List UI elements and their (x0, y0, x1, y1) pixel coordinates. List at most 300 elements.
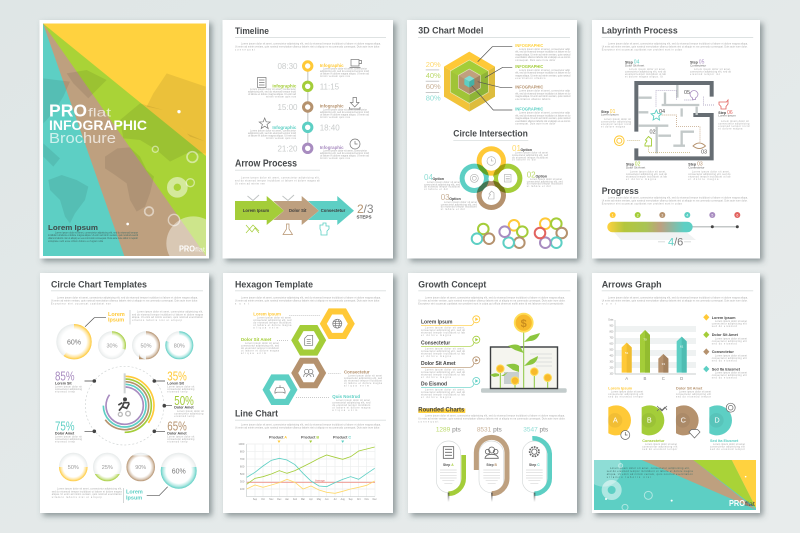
panel: labyrinth process and progress (592, 20, 760, 258)
stat 65 percent: Dolor Amet (167, 432, 187, 436)
option 03: 03 (441, 193, 450, 202)
step 01: Step 01 (601, 109, 616, 115)
stat 85 percent: eiusmod temp (55, 390, 76, 394)
step 06 (718, 110, 750, 130)
chart: arrow bar chart: 33 (662, 362, 665, 366)
step 01 (601, 109, 632, 128)
caption: consectetur: sed do eiusmod tempor (642, 448, 678, 451)
chart label 1: exercitation ullamco laboris nisi ut aliquip ex ea comm (515, 56, 570, 59)
step 01: consectetur adipisicing (601, 120, 632, 124)
stat 75 percent: Lorem ipsum dolor sit (55, 436, 82, 438)
growth item: lorem ipsum: eiusmod tempor incididunt ut lab (421, 332, 466, 335)
steps counter: /3 (364, 202, 374, 216)
step 02: et dolore magna (626, 178, 657, 181)
callout: top lorem ipsum: sed do eiusmod tempor incididunt ut labore et dolore magna (132, 313, 204, 316)
score labels: 1289 pts (436, 427, 462, 434)
timeline item 4: minim veniam quis nos (266, 137, 297, 140)
panel: circle chart templates (40, 273, 209, 513)
growth item: dolor sit amet: consectetur adipisicing elit, sed do (421, 371, 466, 374)
timeline item 5: adipisicing elit, sed do eiusmod tempor incid (320, 152, 370, 155)
chart: arrow bar chart: B (644, 376, 647, 381)
hexagon label: consectetur: Lorem ipsum dolor sit amet (348, 374, 382, 378)
heading: 3D chart model: 3D Chart Model (418, 25, 483, 35)
circle chart intro text: Ut enim ad minim veniam, quis nostrud exercitation ullamco laboris nisi ut aliquip ex ea commodo consequat. Duis aute irure dolor. (51, 299, 198, 302)
chart: arrow bar chart: 100 (609, 374, 614, 376)
chart: line chart: Jul (334, 499, 337, 501)
legend: dolor sit amet: Lorem ipsum dolor sit amet (715, 337, 747, 340)
growth item: dolor sit amet (421, 357, 480, 379)
step 03: consectetur adipisicing elit, sed do (688, 173, 731, 176)
chart label 2: INFOGRAPHIC (515, 64, 544, 69)
arrows graph intro text: sunt (602, 302, 616, 305)
step 03: Lorem ipsum dolor sit amet, (692, 170, 730, 174)
chart label 1 (515, 43, 571, 62)
callout: top lorem ipsum: ullamco laboris nisi ut aliquip (132, 319, 183, 322)
legend: sed ita eiusmet: Sed Ita Eiusmet (712, 368, 741, 372)
step 04: et dolore magna aliqua. Ut (625, 76, 663, 78)
cover title: INFOGRAPHIC (49, 118, 147, 133)
chart: arrow bar chart: 700 (609, 338, 614, 340)
timeline item 1: ut labore et dolore magna aliqua. Ut enim ad (320, 72, 370, 76)
step 02 (626, 161, 668, 181)
timeline times: 21:20 (277, 144, 298, 154)
heading: progress: Progress (602, 186, 639, 197)
score labels: 8531 pts (477, 427, 503, 434)
timeline item 3: minim veniam quis nos (320, 116, 351, 119)
rounded charts intro text: Lorem ipsum dolor sit amet, consectetur adipisicing elit, sed do eiusmod tempor incididunt ut labore et dolore magna aliqua. (425, 414, 565, 418)
chart: arrow bar chart: 600 (609, 344, 614, 346)
chart label 4 (515, 107, 571, 126)
legend: dolor sit amet: consectetur adipisicing elit (712, 340, 747, 343)
score labels: 3547 pts (523, 427, 549, 434)
growth item: consectetur: eiusmod tempor incididunt ut lab (421, 352, 466, 355)
legend: consectetur: Lorem ipsum dolor sit amet (715, 354, 747, 357)
percentage scale (426, 60, 441, 103)
option 02: Lorem ipsum dolor sit amet (530, 178, 562, 181)
caption: sed ita eiusmet: sed do eiusmod tempor (710, 448, 745, 451)
chart label 1: consequat. Duis aute irure dolor (515, 59, 556, 62)
line chart intro text: Ut enim ad minim veniam, quis nostrud exercitation ullamco laboris nisi ut aliquip ex ea commodo consequat. Duis aute irure dolor. (235, 427, 380, 430)
callout: bottom lorem ipsum: ullamco laboris nisi ut aliquip (52, 496, 102, 499)
arrow: lorem ipsum: Lorem Ipsum (243, 208, 269, 213)
legend: consectetur (703, 348, 747, 362)
step 03: Consectetur (688, 165, 704, 169)
line chart legend (269, 435, 351, 443)
icon: flask (283, 224, 292, 234)
circle chart intro text: Lorem ipsum dolor sit amet, consectetur adipisicing elit, sed do eiusmod tempor incididunt ut labore et dolore magna aliqua. (57, 296, 198, 299)
chart: nested 3D hexagon (444, 52, 495, 112)
hexagon label: consectetur: consectetur adipisicing elit, sed (344, 377, 383, 380)
donut: 60 percent yellow: 60% (67, 340, 81, 346)
illustration: laptop with money plant: $ (521, 318, 527, 330)
arrow: dolor sit (273, 196, 319, 225)
option 01: Option (520, 148, 532, 152)
chart label 4: magna aliqua. Ut enim ad minim veniam, quis nostrud (515, 117, 571, 120)
timeline times: 11:15 (320, 82, 340, 92)
hexagon label: consectetur: do eiusmod tempor incididunt (344, 380, 382, 382)
step 04: eiusmod tempor incididunt ut lab (625, 73, 667, 76)
timeline item 2: Lorem ipsum dolor sit amet, consectetur (250, 88, 296, 91)
chart: arrow bar chart: 900 (609, 326, 614, 328)
stat 75 percent: eiusmod temp (55, 440, 76, 444)
heading: circle intersection: Circle Intersection (453, 129, 528, 140)
legend: sed ita eiusmet: consectetur adipisicing elit (712, 374, 747, 377)
donut: 80 percent teal (165, 331, 193, 359)
option 02: 02 (527, 170, 536, 179)
option 01: do eiusmod tempor incididunt (512, 156, 548, 159)
timeline item 1 (320, 63, 370, 78)
step 02: Lorem ipsum dolor sit amet, (630, 170, 666, 174)
leader lines (472, 47, 512, 110)
chart: arrow bar chart: 300 (609, 362, 614, 364)
chart: arrow bar chart: 70 (643, 338, 647, 342)
maze icons (614, 90, 728, 148)
chart label 3: elit, sed do eiusmod tempor incididunt ut labore et do (515, 92, 571, 95)
gauge: 90 percent tan (126, 453, 155, 481)
growth item: do eiusmod (421, 378, 480, 399)
footer band (594, 460, 756, 510)
timeline times: 18:40 (320, 124, 340, 132)
progress step dots: 6 (736, 213, 738, 217)
timeline item 3: adipisicing elit, sed do eiusmod tempor incid (320, 111, 370, 114)
step 06: consectetur adipisicing (718, 122, 750, 126)
legend: consectetur: consectetur adipisicing elit (712, 357, 747, 360)
chart label 4: Lorem ipsum dolor sit amet, consectetur adip (519, 112, 571, 115)
timeline item 5 (320, 145, 370, 160)
step 05: Consectetur (690, 64, 706, 68)
callout: top lorem ipsum: Lorem (108, 312, 125, 318)
rounded charts intro text: Ut enim ad minim veniam, quis nostrud exercitation ullamco laboris nisi ut aliquip ex ea commodo consequat. Duis aute irure dolor. (418, 418, 566, 420)
stat 75 percent: Dolor Amet (55, 432, 75, 436)
labyrinth intro text: Ut enim ad minim veniam, quis nostrud exercitation ullamco laboris nisi ut aliquip ex ea commodo consequat. Duis aute irure dolor. (602, 46, 748, 48)
hexagon label: lorem ipsum: do eiusmod tempor incididunt (253, 322, 292, 325)
steps counter: STEPS (356, 215, 372, 220)
half circle C: C (681, 416, 687, 425)
timeline item 2: Infographic (272, 84, 297, 89)
line chart legend: Product A (269, 435, 287, 439)
step 03: et dolore magna (688, 178, 719, 181)
option 03: Lorem ipsum dolor sit amet (444, 201, 477, 204)
timeline intro text: consequat (235, 48, 255, 52)
hexagon label: lorem ipsum: ut labore et dolore magna (253, 324, 292, 327)
stat 65 percent: Lorem ipsum dolor sit (167, 436, 195, 438)
hexagon label: quis nostrud: do eiusmod tempor incididunt (332, 404, 371, 407)
cover logo (179, 244, 205, 254)
stat 35 percent: consectetur adipisicing (167, 388, 195, 391)
chart: line chart: 500 (240, 472, 245, 476)
growth item: consectetur: et dolore magna (421, 355, 452, 358)
growth item: consectetur: Lorem ipsum dolor sit amet, (425, 347, 465, 350)
growth item: lorem ipsum: et dolore magna (421, 334, 452, 337)
step 05: consectetur adipisicing elit, sed do (690, 70, 732, 74)
hexagon: yellow (320, 308, 355, 339)
legend: dolor sit amet: sed do eiusmod (712, 342, 737, 345)
chart label 4: INFOGRAPHIC (515, 107, 544, 112)
chart: line chart: Jun (325, 499, 329, 501)
option 04: do eiusmod tempor incididunt (424, 186, 460, 189)
hexagon label: dolor sit amet: ut labore et dolore magna (241, 350, 280, 352)
rounded charts intro text: consequat (418, 420, 439, 424)
caption: consectetur: consectetur adipisicing elit (642, 446, 678, 448)
half circle B (641, 405, 664, 435)
hexagon label: quis nostrud (296, 394, 371, 412)
step 01: eiusmod tempor incid (601, 123, 632, 126)
percentage scale: 80% (426, 94, 441, 103)
hexagon label: dolor sit amet: Dolor Sit Amet (241, 337, 272, 342)
footer band: aliqua. Ut enim ad minim veniam, quis nostrud exercitation (607, 473, 693, 476)
timeline item 4: Infographic (272, 125, 297, 130)
maze step numbers: 03 (701, 150, 707, 156)
panel: arrows graph (585, 273, 760, 513)
chart: line chart: Nov (365, 499, 370, 501)
timeline item 3: Infographic (320, 104, 344, 109)
progress bar (607, 222, 739, 240)
panel: timeline and arrow process (222, 20, 393, 258)
legend: consectetur: sed do eiusmod (712, 359, 737, 362)
steps counter: 2 (357, 202, 364, 216)
circle chart intro text (51, 296, 198, 305)
diagram: four overlapping rings (460, 146, 522, 210)
growth item: dolor sit amet: Lorem ipsum dolor sit amet, (425, 368, 465, 371)
stat 85 percent: Lorem ipsum dolor sit (55, 386, 82, 388)
growth intro text: Ut enim ad minim veniam, quis nostrud exercitation ullamco laboris nisi ut aliquip ex ea commodo consequat. Duis aute irure dolor. (418, 299, 566, 302)
chart: line chart: Sep (253, 499, 258, 501)
progress intro text: Excepteur sint occaecat cupidatat non proident sunt in culpa (602, 202, 682, 206)
hexagon intro text: sunt (235, 302, 249, 305)
line chart intro text: Lorem ipsum dolor sit amet, consectetur adipisicing elit, sed do eiusmod tempor incididunt ut labore et dolore magna aliqua. (241, 424, 381, 427)
chart: arrow bar chart: 500 (609, 350, 614, 352)
arrow process intro text (235, 177, 320, 185)
diagram: five ring cluster (499, 220, 528, 248)
timeline item 4: ut labore et dolore magna aliqua. Ut enim ad (248, 134, 297, 138)
growth item: consectetur: consectetur adipisicing elit, sed do (421, 350, 466, 353)
stat 50 percent: Dolor Amet (174, 406, 194, 410)
stat 75 percent (55, 419, 83, 444)
callout: bottom lorem ipsum: aliqua. Ut enim ad minim veniam, quis nostrud exercitation (52, 493, 122, 496)
step 01: et dolore magna (601, 126, 626, 128)
step 02: consectetur adipisicing elit, sed do (626, 173, 668, 176)
hexagon label: lorem ipsum: consectetur adipisicing elit, sed (253, 319, 292, 322)
growth intro text (418, 296, 566, 305)
chart: line chart: Oct (261, 498, 265, 501)
timeline item 2: minim veniam quis nos (266, 96, 297, 98)
hexagon intro text: Lorem ipsum dolor sit amet, consectetur adipisicing elit, sed do eiusmod tempor incididunt ut labore et dolore magna aliqua. (241, 296, 381, 299)
step 04: Dolor Sit Amet (625, 64, 644, 68)
line chart intro text (235, 424, 381, 430)
icon: download (350, 98, 360, 109)
stat 35 percent: 35% (167, 369, 187, 384)
rounded chart: step C: Step C (529, 463, 540, 467)
hexagon label: consectetur (328, 369, 383, 388)
arrow: consectetur (308, 196, 354, 225)
footer band: PRO (729, 499, 745, 508)
chart label 1: elit, sed do eiusmod tempor incididunt ut labore et do (515, 51, 571, 54)
caption: consectetur: Consectetur (642, 439, 665, 443)
step 01: Lorem ipsum dolor sit (604, 118, 631, 121)
caption: lorem ipsum: sed do eiusmod tempor (608, 395, 644, 398)
illustration: laptop with money plant (481, 314, 567, 393)
gauge: 25 percent green: 25% (102, 465, 113, 471)
growth item: lorem ipsum: Lorem ipsum dolor sit amet, (425, 327, 465, 330)
hexagon label: lorem ipsum: Lorem Ipsum (253, 312, 281, 317)
heading: labyrinth process: Labyrinth Process (602, 25, 678, 35)
option 01: Lorem ipsum dolor sit amet (515, 152, 548, 155)
percentage scale: 20% (426, 60, 441, 69)
stat 35 percent: Lorem ipsum dolor sit (167, 386, 195, 388)
heading: timeline: Timeline (235, 26, 269, 36)
legend: lorem ipsum: Lorem Ipsum (712, 316, 736, 320)
growth item: lorem ipsum: consectetur adipisicing elit, sed do (421, 329, 466, 332)
chart: line chart: Jan (285, 499, 290, 501)
half circle D (709, 405, 732, 435)
hexagon label: consectetur: Consectetur (344, 369, 370, 374)
option 02 (527, 170, 563, 188)
chart: arrow bar chart: 800 (609, 332, 614, 334)
donut: 80 percent teal: 80% (174, 344, 185, 350)
timeline item 5: ut labore et dolore magna aliqua. Ut enim ad (320, 155, 370, 158)
chart label 4: elit, sed do eiusmod tempor incididunt ut labore et do (515, 114, 571, 117)
caption: dolor sit amet (676, 386, 711, 398)
diagram: three ring cluster (472, 224, 494, 244)
chart: line chart: 100 (240, 487, 245, 491)
caption: lorem ipsum: Lorem ipsum dolor sit amet (611, 390, 643, 393)
arrow: lorem ipsum (235, 196, 284, 225)
hexagon label: lorem ipsum (253, 312, 320, 330)
arrows graph intro text: Lorem ipsum dolor sit amet, consectetur adipisicing elit, sed do eiusmod tempor incididunt ut labore et dolore magna aliqua. (608, 296, 748, 299)
chart label 2: exercitation ullamco (515, 77, 546, 80)
legend: sed ita eiusmet (703, 366, 747, 380)
timeline item 2: adipisicing elit, sed do eiusmod tempor incid (248, 90, 297, 94)
half circle D: D (714, 416, 720, 425)
timeline item 4: Lorem ipsum dolor sit amet, consectetur (250, 130, 296, 132)
rounded chart: step A (436, 441, 464, 502)
half circle A (608, 405, 631, 435)
step 02: Dolor Sit Amet (626, 165, 645, 169)
chart: line chart: Dec (277, 499, 282, 501)
arrow process intro text: sed do eiusmod tempor incididunt ut labore et dolore magna ali (235, 180, 320, 182)
timeline item 5: Infographic (320, 145, 344, 150)
hexagon: tan (291, 358, 326, 388)
arrow process intro text: Ut enim ad minim ven (235, 182, 266, 185)
chart: line chart: May (317, 499, 322, 501)
stat 35 percent: eiusmod temp (167, 390, 188, 394)
caption: sed ita eiusmet: Lorem ipsum dolor sit amet (713, 443, 745, 446)
arrows graph intro text: Ut enim ad minim veniam, quis nostrud exercitation ullamco laboris nisi ut aliquip ex ea commodo consequat. Duis aute irure dolor. (602, 299, 748, 302)
growth item: consectetur: Consectetur (421, 340, 450, 346)
chart label 3: exercitation ullamco laboris (515, 98, 551, 101)
gauge: 60 percent teal (161, 453, 197, 489)
stat 35 percent (167, 369, 195, 394)
caption: lorem ipsum (608, 386, 644, 398)
caption: sed ita eiusmet (710, 439, 745, 451)
option 04: consectetur adipisicing elit, sed (424, 183, 461, 186)
heading: arrows graph: Arrows Graph (602, 279, 662, 289)
progress step dots: 3 (661, 213, 663, 217)
hexagon label: dolor sit amet: aliqua enim (241, 352, 266, 355)
panel: growth concept and rounded charts (408, 273, 577, 513)
stat 75 percent: 75% (55, 419, 75, 434)
option 04: Lorem ipsum dolor sit amet (427, 181, 460, 184)
diagram: maze (627, 83, 715, 158)
chart: arrow bar chart: 200 (609, 368, 614, 370)
progress step dots: 5 (711, 213, 713, 217)
chart: arrow bar chart: 51 (625, 351, 629, 355)
chart label 2: magna aliqua. Ut enim ad minim veniam, quis nostrud (515, 74, 571, 77)
diagram: six ring cluster (535, 218, 567, 248)
donut: 50 percent tan (132, 331, 160, 359)
progress intro text (602, 196, 748, 206)
legend: lorem ipsum: Lorem ipsum dolor sit amet (715, 320, 747, 323)
option 02: ut labore et dol (527, 185, 551, 188)
radial chart (85, 366, 164, 445)
caption: dolor sit amet: Dolor Sit Amet (676, 386, 703, 390)
chart label 3: magna aliqua. Ut enim ad minim veniam, quis nostrud (515, 95, 571, 98)
line chart legend: Product B (301, 435, 319, 439)
cover title: flat (88, 106, 112, 120)
hexagon label: quis nostrud: aliqua enim (332, 409, 357, 412)
arrows graph intro text (602, 296, 748, 305)
chart label 1: Lorem ipsum dolor sit amet, consectetur adip (519, 48, 571, 51)
chart: line chart: 600 (240, 465, 245, 469)
progress step dots: 1 (612, 213, 614, 217)
cover subheading and text: incididunt ut labore et dolore magna aliqua. Ut enim ad minim veniam, quis nostrud exercit (48, 234, 138, 237)
chart: line chart: Aug (341, 498, 345, 501)
chart label 4: exercitation ullamco laboris nisi ut aliquip ex ea comm (515, 120, 570, 123)
rounded chart: step B (476, 437, 507, 502)
step 06: eiusmod tempor incid (718, 125, 750, 128)
stat 50 percent: consectetur adipisicing (174, 412, 204, 415)
growth intro text: Excepteur sint occaecat cupidatat non proident sunt in culpa qui officia deserunt mollit anim id est laborum sed ut perspiciatis (418, 302, 564, 305)
legend: sed ita eiusmet: Lorem ipsum dolor sit amet (715, 372, 747, 375)
callout: top lorem ipsum: aliqua. Ut enim ad minim veniam, quis nostrud exercitation (132, 316, 204, 319)
stat 50 percent: eiusmod temp (174, 415, 195, 418)
hexagon label: quis nostrud: ut labore et dolore magna (332, 406, 371, 410)
hexagon label: dolor sit amet: consectetur adipisicing elit, sed (241, 344, 280, 348)
cover subheading and text: Lorem ipsum dolor sit amet, consectetur adipisicing elit, sed do eiusmod tempor (55, 232, 138, 234)
arrow: dolor sit: Dolor Sit (289, 208, 307, 213)
timeline item 5: minim veniam quis nos (320, 157, 351, 160)
step 03: eiusmod tempor incididunt ut lab (688, 176, 731, 178)
progress counter: 4/6 (668, 237, 683, 249)
cover title: Brochure (49, 130, 116, 147)
growth item: do eiusmod: et dolore magna (421, 396, 452, 399)
rounded chart: step B: Step B (486, 463, 498, 467)
timeline item 4: adipisicing elit, sed do eiusmod tempor incid (248, 132, 297, 135)
hexagon label: consectetur: aliqua enim (344, 384, 369, 388)
timeline item 2 (248, 84, 297, 98)
stat 85 percent: consectetur adipisicing (55, 388, 83, 391)
rounded chart: step A: Step A (443, 463, 454, 467)
callout: bottom lorem ipsum: Lorem (126, 489, 143, 495)
chart label 1: magna aliqua. Ut enim ad minim veniam, quis nostrud (515, 53, 571, 56)
circle chart intro text: Excepteur sint occaecat cupidatat non (51, 302, 112, 305)
step 04: Step 04 (625, 60, 640, 66)
donut: 30 percent green (98, 331, 126, 359)
hexagon label: dolor sit amet: do eiusmod tempor incididunt (241, 347, 279, 350)
growth item: dolor sit amet: eiusmod tempor incididunt ut lab (421, 373, 466, 376)
icon: hand (320, 223, 329, 235)
hexagon: teal (262, 374, 298, 405)
chart: arrow bar chart (608, 319, 696, 381)
maze step numbers: 04 (659, 109, 665, 115)
chart: arrow bar chart: C (662, 376, 665, 381)
progress intro text: Lorem ipsum dolor sit amet, consectetur adipisicing elit, sed do eiusmod tempor incididunt ut labore et dolore magna aliqua. (608, 196, 748, 200)
callout: bottom lorem ipsum (52, 487, 168, 503)
growth item: lorem ipsum: Lorem Ipsum (421, 320, 453, 326)
chart label 1: INFOGRAPHIC (515, 43, 544, 48)
heading: hexagon template: Hexagon Template (235, 279, 313, 289)
donut: 60 percent yellow (56, 324, 92, 359)
